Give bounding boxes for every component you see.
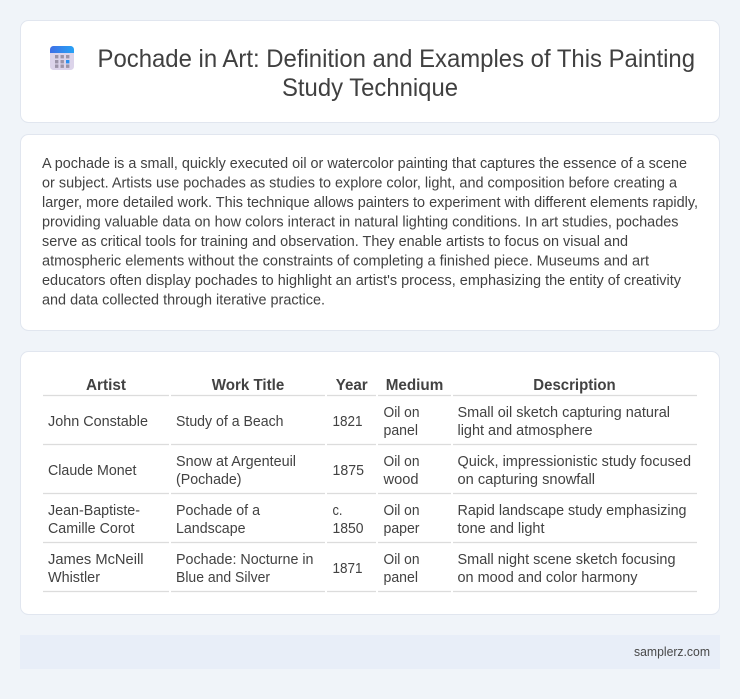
table row: James McNeill Whistler: panel [384, 570, 418, 586]
table row: James McNeill Whistler: Blue and Silver [176, 570, 270, 586]
table row: James McNeill Whistler: on mood and color harmony [458, 570, 638, 586]
table row: John Constable: 1821 [332, 414, 362, 430]
table header row: Artist [86, 377, 127, 394]
table row: Claude Monet: wood [382, 472, 418, 488]
table header row: Year [336, 377, 368, 394]
title: Pochade in Art: Definition and Examples of This Painting [98, 46, 695, 73]
text block: definition: educators often display pochades to highlight an artist's process, emphasizing the entity of creativity [42, 273, 682, 289]
table row: Jean-Baptiste-Camille Corot: Camille Corot [48, 521, 134, 537]
table row: Claude Monet: (Pochade) [176, 472, 242, 488]
footer bar [20, 635, 720, 669]
table row: James McNeill Whistler: Small night scene sketch focusing [458, 552, 676, 568]
table row: James McNeill Whistler: Pochade: Nocturne in [176, 552, 314, 568]
icon: calendar [50, 46, 74, 70]
table row: Jean-Baptiste-Camille Corot: Rapid landscape study emphasizing [458, 503, 686, 519]
table row: Claude Monet: Snow at Argenteuil [176, 454, 296, 470]
table row: Claude Monet [48, 454, 691, 488]
table header row: Medium [386, 377, 443, 394]
table row: John Constable: Study of a Beach [176, 414, 284, 430]
table row: Jean-Baptiste-Camille Corot: Oil on [384, 503, 420, 519]
table row: Claude Monet: Quick, impressionistic study focused [458, 454, 691, 470]
text block: definition: atmospheric elements without the constraints of completing a finished piece. Museums and art [42, 254, 649, 270]
table row: John Constable: Oil on [384, 405, 420, 421]
table row: John Constable: Small oil sketch capturing natural [458, 405, 670, 421]
table row: James McNeill Whistler: James McNeill [48, 552, 144, 568]
table row: Jean-Baptiste-Camille Corot: Pochade of a [176, 503, 260, 519]
table row: James McNeill Whistler: Whistler [48, 570, 100, 586]
table row: Jean-Baptiste-Camille Corot: tone and light [458, 521, 544, 537]
text block: definition: or subject. Artists use pochades as studies to explore color, light, and composition before creating a [42, 176, 677, 192]
table header row: Work Title [212, 377, 284, 394]
table row: Jean-Baptiste-Camille Corot: 1850 [332, 521, 364, 537]
table row: Claude Monet: Oil on [384, 454, 420, 470]
footer source text: samplerz.com [634, 644, 710, 659]
text block: definition: serve as critical tools for training and observation. They enable artists to focus on visual and [42, 234, 628, 250]
table row: James McNeill Whistler: 1871 [332, 561, 362, 577]
table row: Jean-Baptiste-Camille Corot: c. [332, 503, 342, 519]
table row: James McNeill Whistler: Oil on [384, 552, 420, 568]
title: Study Technique [282, 75, 458, 102]
table header row [86, 377, 616, 394]
table header row: Description [533, 377, 616, 394]
table row: John Constable [48, 405, 670, 439]
text block: definition: larger, more detailed work. This technique allows painters to experiment with different elements rapidly, [42, 195, 698, 211]
text block: definition: providing valuable data on how colors interact in natural lighting conditions. In art studies, pochades [42, 214, 678, 230]
panel: definition paragraph [20, 134, 720, 330]
table row: Jean-Baptiste-Camille Corot: Jean-Baptiste- [48, 503, 140, 519]
text block: definition [42, 156, 698, 308]
table row: John Constable: light and atmosphere [458, 423, 592, 439]
table row: Jean-Baptiste-Camille Corot: paper [384, 521, 420, 537]
table row: Jean-Baptiste-Camille Corot [48, 503, 686, 537]
panel: table of examples [20, 352, 720, 614]
table row: James McNeill Whistler [48, 552, 676, 586]
text block: definition: A pochade is a small, quickly executed oil or watercolor painting that captures the essence of a scene [42, 156, 687, 172]
title [98, 46, 695, 102]
table row: John Constable: panel [384, 423, 418, 439]
panel: header [20, 20, 720, 122]
table row: Claude Monet: on capturing snowfall [458, 472, 595, 488]
table row: Jean-Baptiste-Camille Corot: Landscape [176, 521, 246, 537]
table row: John Constable: John Constable [48, 414, 148, 430]
table row: Claude Monet: Claude Monet [48, 463, 136, 479]
table row: Claude Monet: 1875 [332, 463, 364, 479]
text block: definition: and data collected through iterative practice. [42, 292, 325, 308]
